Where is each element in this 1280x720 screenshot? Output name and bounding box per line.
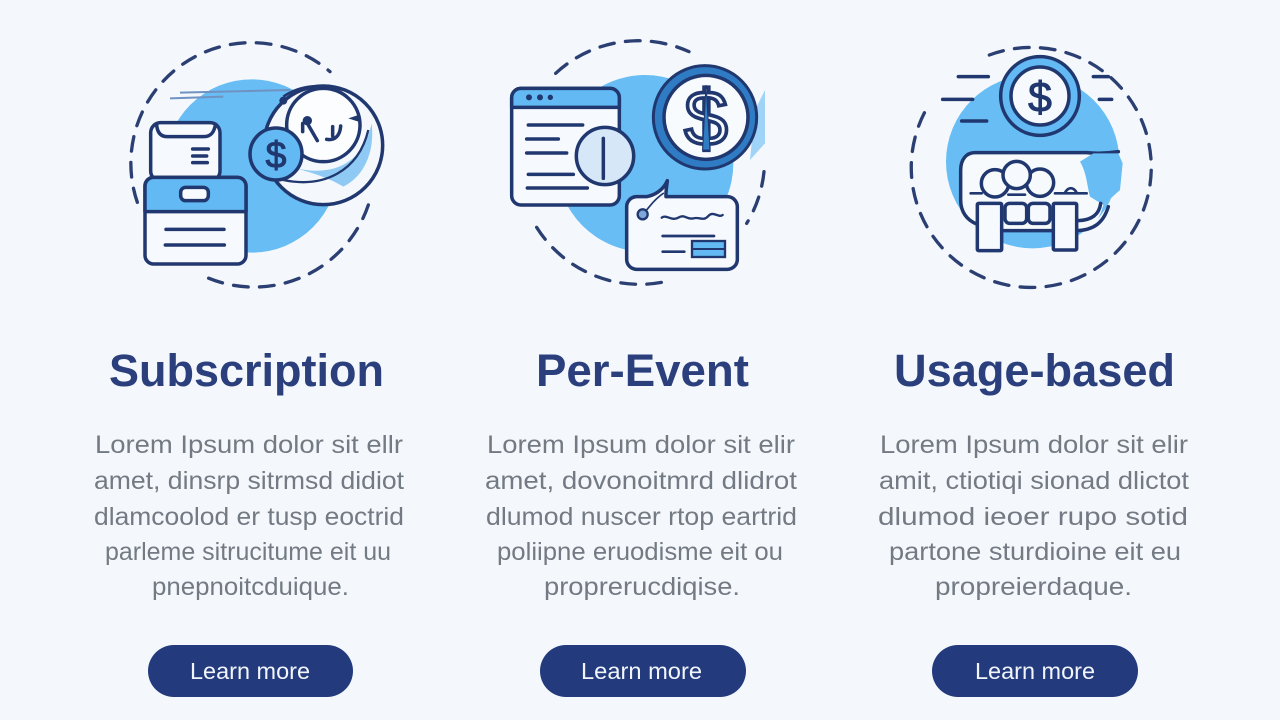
text block: per-event: poliipne eruodisme eit ou	[497, 538, 783, 566]
button: usage-based: Learn more	[975, 658, 1095, 684]
text block: subscription	[94, 431, 404, 601]
blue background circle	[557, 75, 733, 252]
button: per-event	[540, 645, 746, 697]
button: usage-based	[932, 645, 1138, 697]
text block: per-event: amet, dovonoitmrd dlidrot	[485, 467, 797, 495]
icon: subscription	[131, 43, 383, 287]
heading: per-event: Per-Event	[536, 345, 749, 396]
icon: per-event	[512, 41, 765, 284]
button: subscription: Learn more	[190, 658, 310, 684]
storage box	[145, 177, 246, 264]
blue background circle	[165, 79, 338, 253]
table body	[961, 152, 1123, 231]
text block: subscription: pnepnoitcduique.	[152, 573, 349, 601]
text block: subscription: Lorem Ipsum dolor sit ellr	[95, 431, 403, 459]
button: per-event: Learn more	[581, 658, 702, 684]
text block: usage-based: Lorem Ipsum dolor sit elir	[880, 431, 1188, 459]
dollar coin: $	[1028, 74, 1052, 122]
text block: usage-based: propreierdaque.	[935, 573, 1132, 601]
dashed ring	[537, 41, 764, 284]
text block: per-event: Lorem Ipsum dolor sit elir	[487, 431, 795, 459]
text block: usage-based: amit, ctiotiqi sionad dlictot	[879, 467, 1189, 495]
text block: usage-based: partone sturdioine eit eu	[889, 538, 1181, 566]
message card	[627, 181, 737, 269]
blue wedge	[750, 90, 765, 160]
text block: usage-based: dlumod ieoer rupo sotid	[878, 503, 1188, 531]
text block: usage-based	[878, 431, 1189, 601]
people circles	[971, 161, 1087, 197]
large dollar coin: $	[684, 74, 728, 162]
speed lines	[943, 77, 1112, 121]
blue background circle	[946, 75, 1119, 248]
text block: subscription: parleme sitrucitume eit uu	[105, 538, 391, 566]
dollar coin	[1001, 57, 1079, 135]
dashed ring	[911, 47, 1151, 287]
heading: usage-based: Usage-based	[894, 345, 1175, 396]
swirl globe	[264, 86, 383, 205]
text block: subscription: amet, dinsrp sitrmsd didiot	[94, 467, 404, 495]
large dollar coin	[653, 66, 757, 169]
text block: per-event	[485, 431, 797, 601]
seats and legs	[977, 203, 1077, 251]
icon: usage-based	[911, 47, 1151, 287]
button: subscription	[148, 645, 353, 697]
dollar coin	[250, 128, 302, 180]
text block: per-event: dlumod nuscer rtop eartrid	[486, 503, 797, 531]
motion lines	[170, 90, 290, 98]
browser window	[512, 88, 619, 205]
text block: per-event: proprerucdiqise.	[544, 573, 740, 601]
text block: subscription: dlamcoolod er tusp eoctrid	[94, 503, 404, 531]
dashed ring	[131, 43, 368, 287]
info circle	[576, 127, 634, 185]
dollar coin: $	[266, 133, 287, 175]
document card	[151, 123, 220, 181]
heading: subscription: Subscription	[109, 345, 384, 396]
